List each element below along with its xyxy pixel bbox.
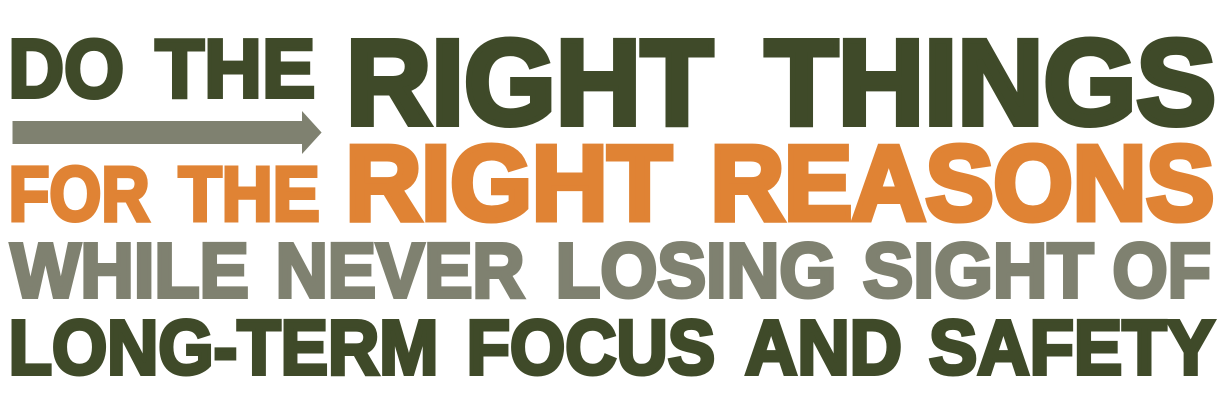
text line: long-term focus and safety: SAFETY — [929, 305, 1215, 391]
text line: while never losing sight of — [11, 228, 1211, 314]
text line: long-term focus and safety: LONG-TERM — [9, 305, 438, 391]
heading: right things: THINGS — [765, 14, 1216, 150]
heading: for the — [9, 153, 320, 238]
text line: long-term focus and safety — [9, 305, 1215, 391]
heading: do the — [8, 22, 315, 115]
heading: do the: DO — [8, 22, 124, 115]
heading: right reasons — [346, 125, 1214, 243]
text line: while never losing sight of: OF — [1112, 228, 1211, 314]
text line: while never losing sight of: LOSING — [556, 228, 836, 314]
icon: arrow — [12, 111, 322, 154]
heading: right things — [346, 14, 1216, 150]
heading: for the: FOR — [9, 153, 150, 238]
text line: while never losing sight of: WHILE — [11, 228, 249, 314]
text line: long-term focus and safety: FOCUS — [467, 305, 715, 391]
heading: right reasons: REASONS — [711, 125, 1214, 243]
heading: do the: THE — [155, 22, 315, 115]
text line: while never losing sight of: NEVER — [276, 228, 525, 314]
heading: right things: RIGHT — [346, 14, 713, 150]
text line: while never losing sight of: SIGHT — [863, 228, 1094, 314]
heading: right reasons: RIGHT — [346, 125, 672, 243]
heading: for the: THE — [178, 153, 320, 238]
text line: long-term focus and safety: AND — [745, 305, 902, 391]
